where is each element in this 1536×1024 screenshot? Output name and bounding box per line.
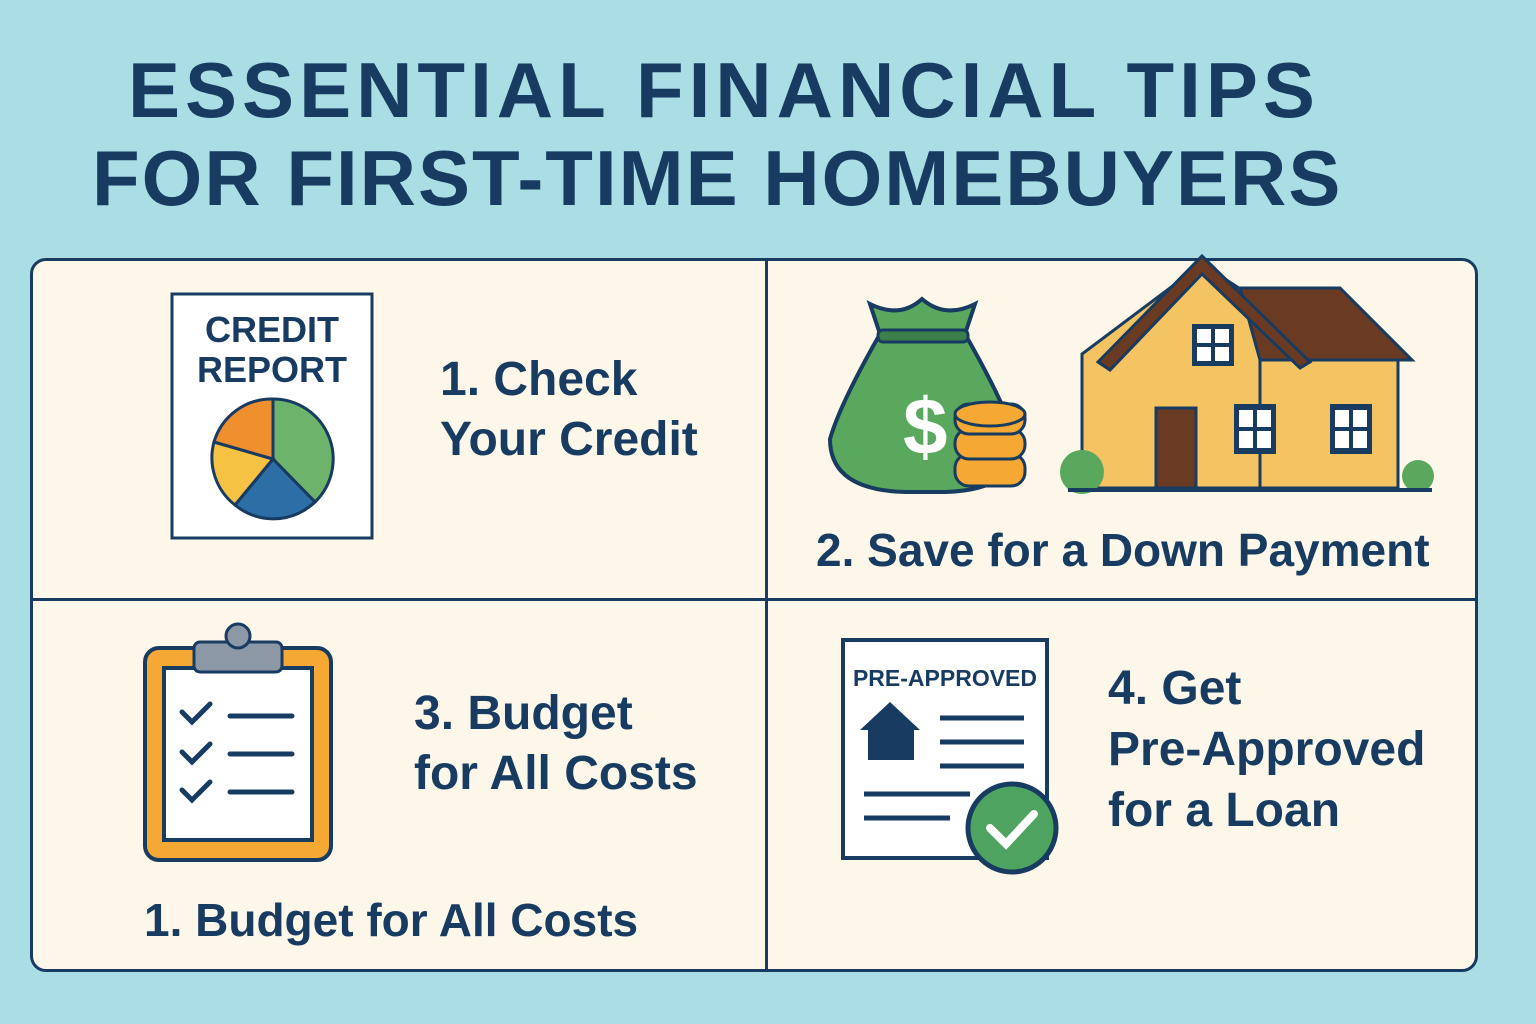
text: tip 1 [440, 353, 698, 466]
text: tip 3: for All Costs [414, 747, 698, 800]
text: tip 3 [414, 687, 698, 800]
icon: money bag and house [828, 254, 1434, 494]
icon: credit report: CREDIT [205, 309, 339, 350]
text: tip 4: for a Loan [1108, 784, 1340, 837]
icon: pre-approved document [841, 638, 1058, 874]
icon: credit report: REPORT [197, 349, 347, 390]
text: tip 2: 2. Save for a Down Payment [816, 524, 1430, 576]
icon: credit report [170, 292, 374, 540]
text: tip 3 caption: 1. Budget for All Costs [144, 894, 638, 946]
text: tip 4: 4. Get [1108, 662, 1241, 715]
text: tip 1: 1. Check [440, 353, 637, 406]
main panel [30, 258, 1478, 972]
title: FOR FIRST-TIME HOMEBUYERS [92, 134, 1342, 222]
title [92, 46, 1342, 222]
text: tip 1: Your Credit [440, 413, 698, 466]
text: tip 4 [1108, 662, 1425, 837]
title: ESSENTIAL FINANCIAL TIPS [128, 46, 1320, 134]
text: tip 3: 3. Budget [414, 687, 633, 740]
icon: pre-approved document: PRE-APPROVED [853, 665, 1037, 691]
icon: money bag and house: $ [903, 382, 948, 471]
text: tip 4: Pre-Approved [1108, 723, 1425, 776]
icon: clipboard [143, 622, 333, 862]
